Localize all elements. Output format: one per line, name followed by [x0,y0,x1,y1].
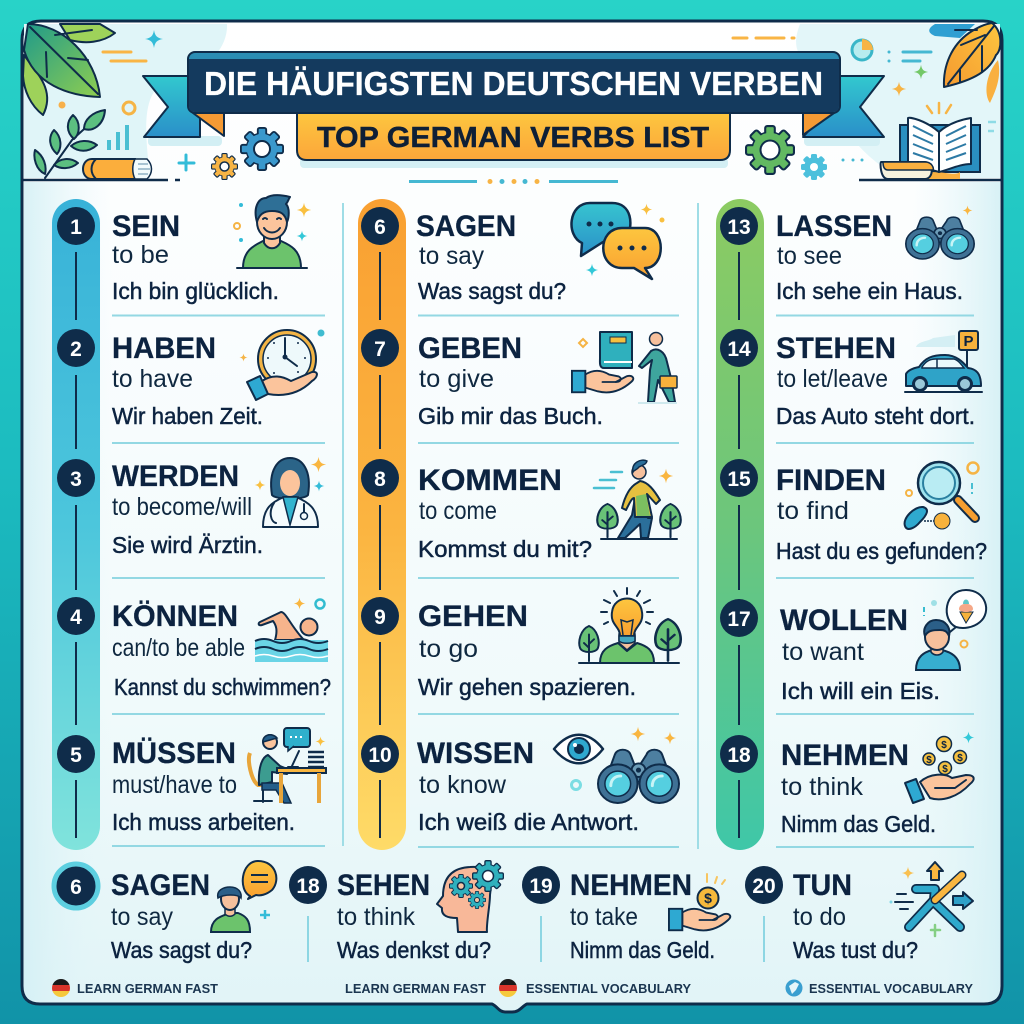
title banner: DIE HÄUFIGSTEN DEUTSCHEN VERBEN [204,65,823,102]
verb text [417,737,639,835]
bottom entry: TUN [745,862,973,963]
verb text: to become/will [112,493,252,521]
number badge [57,329,95,367]
verb text: KOMMEN [418,464,562,497]
verb text: to come [419,497,497,525]
verb text: to let/leave [777,365,888,393]
entry 6: SAGEN [361,203,664,304]
gear green right [746,126,794,174]
small bar chart [107,125,129,150]
verb text [418,332,603,429]
verb text: Ich muss arbeiten. [112,809,295,835]
number badge [57,459,95,497]
verb text: Wir gehen spazieren. [418,674,636,700]
number badge: 13 [727,216,751,239]
verb text [337,869,491,963]
number badge [361,735,399,773]
number badge: 6 [70,876,82,899]
decorative corner tints [24,24,1000,178]
footer label: ESSENTIAL VOCABULARY [809,981,973,996]
divider [763,916,765,962]
number badge: 9 [374,606,386,629]
verb text [111,869,252,963]
verb text: SAGEN [416,210,516,243]
number badge [720,735,758,773]
entry 3: WERDEN [57,457,326,558]
verb text [570,869,715,963]
entry 18: NEHMEN [720,732,974,837]
entry 10: WISSEN [361,727,679,835]
verb text: to say [419,242,484,270]
number badge: 7 [374,338,386,361]
sparkles right [892,65,996,131]
icon: coins and hand: $ [942,764,948,775]
entry 13: LASSEN [720,206,974,304]
number badge [361,329,399,367]
icon: happy person [234,195,311,268]
number badge: 19 [529,875,553,898]
number badge [361,459,399,497]
verb text: Hast du es gefunden? [776,538,987,564]
verb text: NEHMEN [570,869,692,902]
sprig [34,110,105,178]
bottom entry: NEHMEN [522,866,730,963]
ribbon tails [143,76,884,137]
verb text: to find [777,497,849,525]
number badge: 3 [70,468,82,491]
number badge [57,597,95,635]
verb text [112,210,279,304]
number badge [720,599,758,637]
number badge: 2 [70,338,82,361]
entry 7: GEBEN [361,329,677,429]
verb text: Ich sehe ein Haus. [776,278,963,304]
left dashes and star [58,30,194,170]
number badge: 6 [374,216,386,239]
number badge [57,207,95,245]
verb text [780,604,940,704]
number badge: 17 [727,608,751,631]
icon: doctor [255,457,326,527]
verb text: GEBEN [418,332,522,365]
column separators [343,203,698,849]
verb text: STEHEN [776,332,896,365]
footer label: LEARN GERMAN FAST [77,981,218,996]
verb text: Kommst du mit? [418,536,592,562]
verb text [418,600,636,700]
icon: person thinking of ice cream [916,590,986,670]
verb text [776,464,987,564]
globe badge [786,980,802,996]
verb text: SEHEN [337,869,430,902]
verb text: WISSEN [417,737,534,770]
verb text: FINDEN [776,464,886,497]
verb text: Sie wird Ärztin. [112,532,263,558]
verb text: MÜSSEN [112,737,236,770]
number badge [522,866,560,904]
entry 1: SEIN [57,195,311,304]
entry 17: WOLLEN [720,590,986,704]
verb text: SAGEN [111,869,210,902]
verb text: LASSEN [776,210,892,243]
entry 8: KOMMEN [361,459,681,562]
verb text [776,210,963,304]
verb text: to think [781,773,864,801]
verb text [781,739,936,837]
icon: speech bubbles [572,203,664,279]
verb text: KÖNNEN [112,600,238,633]
verb text [793,869,918,963]
verb text: Was sagst du? [418,278,566,304]
icon: coins and hand: $ [941,740,947,751]
icon: head with gears [437,861,503,932]
verb text: NEHMEN [781,739,909,772]
verb text: to think [337,903,415,931]
verb text: SEIN [112,210,180,243]
divider [540,916,542,962]
verb text: to take [570,903,638,931]
icon: car and parking sign: P [963,333,974,350]
number badge [720,207,758,245]
subtitle ribbon [297,113,730,160]
number badge [745,866,783,904]
icon: car and parking sign [905,331,982,392]
header rule [22,38,1002,184]
verb text: to go [419,635,478,663]
icon: coins and hand: $ [957,753,963,764]
verb text: Ich bin glücklich. [112,278,279,304]
entry 5: MÜSSEN [57,728,326,835]
open book [881,118,980,179]
number badge: 10 [368,744,392,767]
icon: person with speech bubble [211,861,276,932]
number badge: 4 [70,606,82,629]
left leaves [23,24,115,115]
column 2 bar [358,199,406,850]
number badge: 18 [727,744,751,767]
verb text: WOLLEN [780,604,908,637]
icon: eye and binoculars [554,727,679,803]
verb text: Das Auto steht dort. [776,403,975,429]
icon: book, hand and walker [572,332,677,403]
number badge: 15 [727,468,751,491]
number badge: 20 [752,875,776,898]
title banner [188,52,840,113]
icon: crossing arrows [890,862,973,936]
header section [22,23,1002,184]
icon: coins and hand: $ [926,755,932,766]
flag middle [499,979,517,997]
divider [307,916,309,962]
icon: walking person and trees [594,460,681,539]
verb text: HABEN [112,332,216,365]
column 3 bar [716,199,764,850]
icon: magnifying glass [905,462,978,529]
verb text: Nimm das Geld. [570,937,715,963]
icon: person at desk [249,728,326,803]
verb text: to say [111,903,173,931]
bottom entry: SEHEN [289,861,503,963]
verb text: Was tust du? [793,937,918,963]
pie chart and lines [852,39,931,62]
entry 2: HABEN [57,329,324,429]
bottom entry: SAGEN [54,861,276,963]
ribbon shadows [148,136,880,168]
flag left [52,979,70,997]
right leaf [929,23,1000,103]
footer label: ESSENTIAL VOCABULARY [526,981,691,996]
verb text: to want [782,638,864,666]
icon: coin and hand: $ [704,890,712,906]
icon: coins and hand [905,732,974,803]
gear teal right [802,155,864,179]
book bottom left [83,159,152,179]
verb text: TUN [793,869,852,902]
number badge: 18 [296,875,320,898]
verb text: Ich weiß die Antwort. [418,809,639,835]
number badge [289,866,327,904]
icon: binoculars [906,206,974,259]
verb text: GEHEN [418,600,528,633]
number badge [54,864,98,908]
verb text: to give [419,365,494,393]
number badge: 8 [374,468,386,491]
number badge: 5 [70,744,82,767]
verb text: Ich will ein Eis. [781,678,940,704]
number badge [57,735,95,773]
gear orange left [212,154,237,179]
verb text: Was sagst du? [111,937,252,963]
verb text: Wir haben Zeit. [112,403,263,429]
number badge: 14 [727,338,751,361]
subtitle ribbon: TOP GERMAN VERBS LIST [317,122,709,154]
footer label: LEARN GERMAN FAST [345,981,486,996]
verb text: WERDEN [112,460,239,493]
verb text [112,460,263,558]
verb text: Kannst du schwimmen? [114,674,331,700]
verb text [112,600,331,700]
number badge [720,459,758,497]
entry 15: FINDEN [720,459,987,564]
icon: coin and hand [669,874,730,930]
row dividers [112,316,974,847]
verb text: Was denkst du? [337,937,491,963]
column 1 bar [52,199,100,850]
number badge [361,597,399,635]
verb text: must/have to [112,771,237,799]
icon: swimmer [255,598,328,662]
verb text: Nimm das Geld. [781,811,936,837]
verb text [416,210,566,304]
gear blue left [241,128,283,170]
verb text [776,332,975,429]
entry 4: KÖNNEN [57,597,331,700]
verb text [112,737,295,835]
verb text: can/to be able [112,634,245,662]
verb text [112,332,263,429]
icon: light bulb person [579,588,681,663]
number badge [720,329,758,367]
number badge: 1 [70,216,82,239]
verb text: to have [112,365,193,393]
verb text: to know [419,771,507,799]
entry 9: GEHEN [361,588,681,700]
entry 14: STEHEN [720,329,982,429]
number badge [361,207,399,245]
verb text: Gib mir das Buch. [418,403,603,429]
verb text [418,464,592,562]
footer [52,979,973,997]
verb text: to see [777,242,842,270]
verb text: to be [112,241,169,269]
verb text: to do [793,903,846,931]
icon: clock in hand [239,330,324,400]
